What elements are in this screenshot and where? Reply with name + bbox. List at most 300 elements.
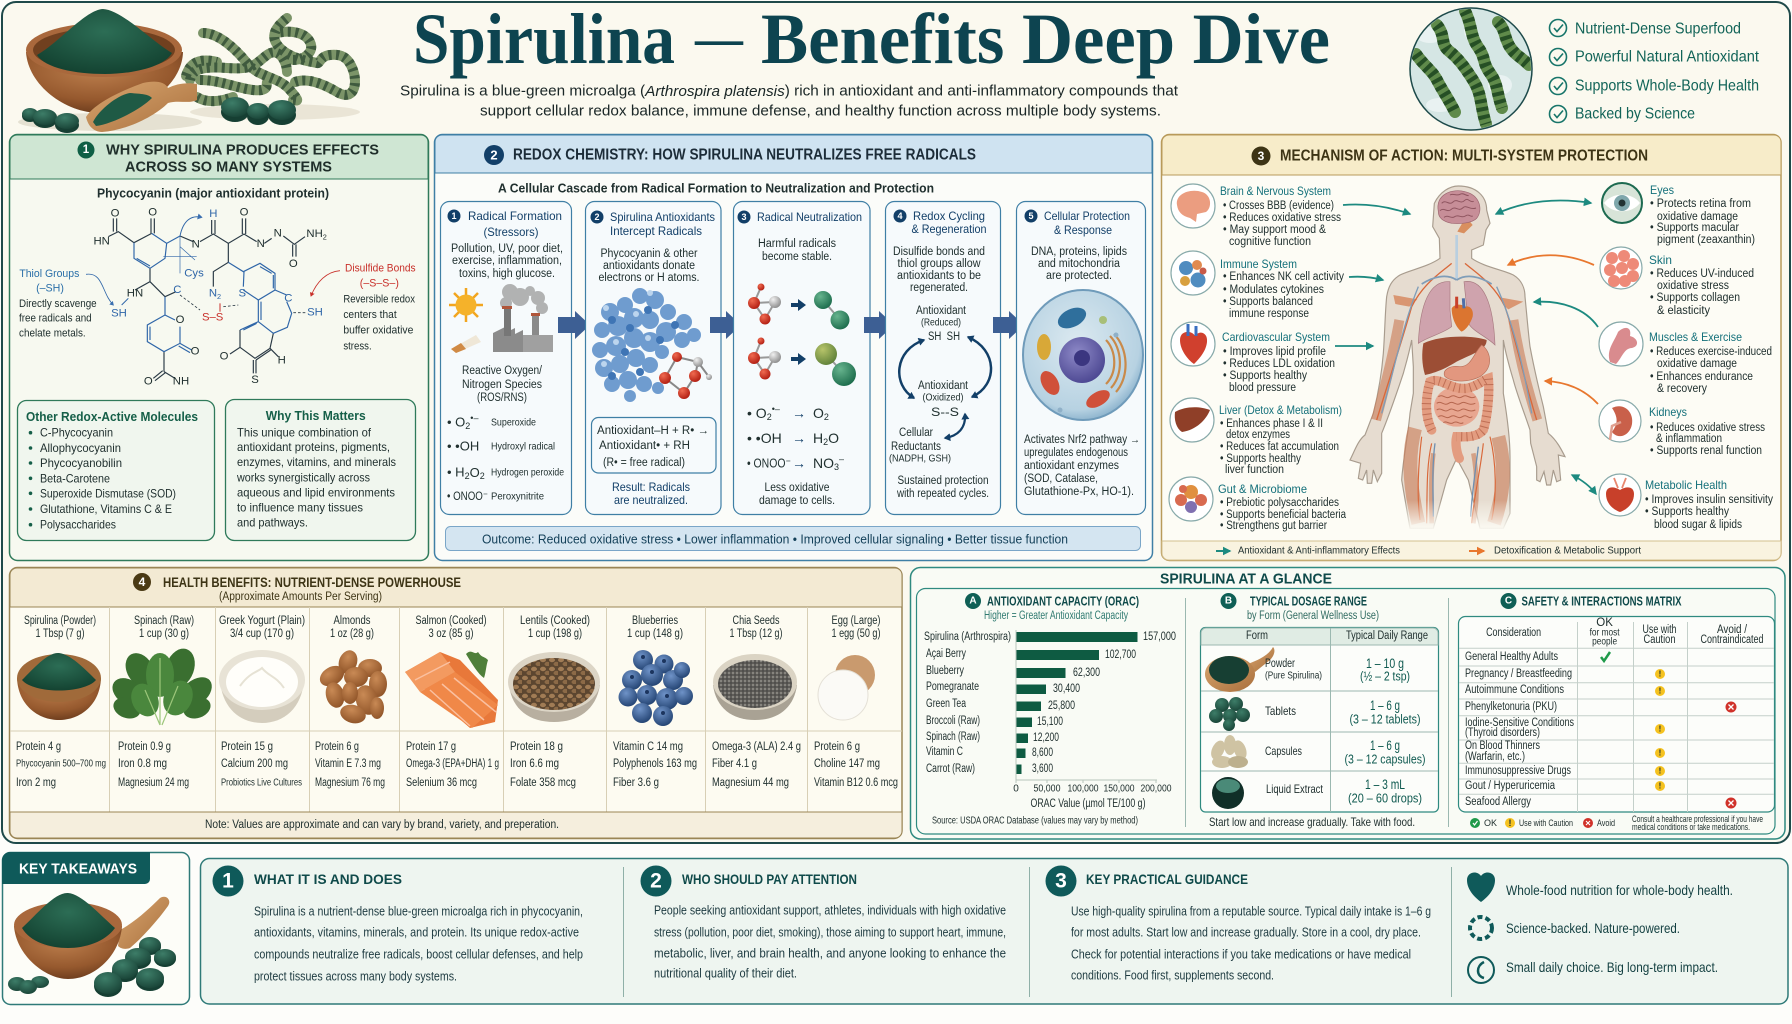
step 2: spirulina antioxidants bbox=[586, 202, 721, 514]
table C: safety and interactions matrix: (Thyroid disorders) bbox=[1465, 727, 1540, 739]
safety legend bbox=[1470, 814, 1763, 832]
slogans with icons: Whole-food nutrition for whole-body health. bbox=[1506, 882, 1733, 898]
heart bbox=[1452, 305, 1473, 332]
food: spirulina powder bbox=[16, 615, 106, 789]
formula box: Antioxidant• + RH bbox=[599, 440, 690, 452]
step 5: cellular protection: Activates Nrf2 pathway → bbox=[1024, 434, 1140, 446]
callout: disulfide bonds: stress. bbox=[343, 341, 372, 353]
chart: phycocyanin molecule diagram: O bbox=[176, 314, 185, 326]
step 1: radical formation bbox=[440, 202, 572, 514]
food: spirulina powder: Phycocyanin 500–700 mg bbox=[16, 758, 106, 770]
system: cardiovascular: • Improves lipid profile bbox=[1223, 346, 1326, 358]
chart A: ORAC bar chart: 0 bbox=[1013, 784, 1019, 794]
food: egg: Choline 147 mg bbox=[814, 758, 880, 770]
chart A: ORAC bar chart: 15,100 bbox=[1037, 716, 1063, 728]
step 4: redox cycling: regenerated. bbox=[910, 282, 968, 294]
chart: phycocyanin molecule diagram: O bbox=[144, 376, 153, 388]
food: spirulina powder: Spirulina (Powder) bbox=[24, 615, 96, 627]
step 1: radical formation: (ROS/RNS) bbox=[477, 392, 527, 404]
icon: powder scoop bbox=[1205, 647, 1274, 692]
table C: safety and interactions matrix: Seafood Allergy bbox=[1465, 796, 1531, 808]
step 3: radical neutralization: → bbox=[792, 430, 806, 446]
takeaway 2: 2 bbox=[650, 870, 662, 892]
stomach bbox=[1444, 345, 1490, 381]
system: immune: immune response bbox=[1229, 308, 1309, 320]
panel 2 header bbox=[435, 135, 1152, 173]
system: liver: • Enhances phase I & II bbox=[1220, 418, 1323, 430]
step 3: radical neutralization: • ONOO⁻ bbox=[747, 456, 791, 470]
step 3: radical neutralization: 2 bbox=[767, 412, 772, 422]
takeaway 2: WHO SHOULD PAY ATTENTION bbox=[682, 871, 857, 887]
chart A: ORAC bar chart: 100,000 bbox=[1068, 784, 1099, 794]
panel 1 header: 1 bbox=[83, 144, 90, 156]
food: lentils: Iron 6.6 mg bbox=[510, 758, 559, 770]
takeaway 3: KEY PRACTICAL GUIDANCE bbox=[1086, 871, 1248, 887]
table B: typical dosage range bbox=[1200, 593, 1438, 829]
title: Spirulina bbox=[413, 0, 675, 79]
table B: typical dosage range: (3 – 12 tablets) bbox=[1350, 712, 1420, 726]
box: other redox-active molecules: Phycocyanobilin bbox=[40, 456, 122, 470]
step 2: spirulina antioxidants: Intercept Radicals bbox=[610, 224, 702, 238]
panel 1 header bbox=[10, 135, 428, 179]
panel 2 header: REDOX CHEMISTRY: HOW SPIRULINA NEUTRALIZES FREE RADICALS bbox=[513, 146, 976, 164]
takeaway 1: antioxidants, vitamins, minerals, and protein. Its unique redox-active bbox=[254, 924, 579, 940]
chart A: ORAC bar chart: ORAC Value (µmol TE/100 g) bbox=[1030, 798, 1146, 810]
step 1: radical formation: Peroxynitrite bbox=[491, 492, 544, 502]
food: blueberries: Vitamin C 14 mg bbox=[613, 741, 683, 753]
system: kidneys: • Supports renal function bbox=[1650, 445, 1762, 457]
step 2: spirulina antioxidants: Spirulina Antioxidants bbox=[610, 210, 715, 224]
diagram: redox cycle: Cellular bbox=[899, 427, 933, 439]
step 1: radical formation: 2 bbox=[465, 471, 470, 481]
table B: typical dosage range: Form bbox=[1246, 630, 1268, 642]
table C: safety and interactions matrix: OK bbox=[1596, 617, 1613, 629]
box: why this matters: to influence many tissues bbox=[237, 500, 363, 514]
system: skin: & elasticity bbox=[1657, 305, 1710, 317]
food: spinach: Iron 0.8 mg bbox=[118, 758, 167, 770]
box: other redox-active molecules: Other Redox-Active Molecules bbox=[26, 409, 198, 424]
system: eyes: • Supports macular bbox=[1650, 222, 1739, 234]
system: brain and nervous: Brain & Nervous System bbox=[1220, 184, 1331, 198]
step 2: spirulina antioxidants: 2 bbox=[594, 212, 600, 222]
step 3: radical neutralization: Radical Neutralization bbox=[757, 210, 862, 224]
box: why this matters bbox=[226, 400, 416, 540]
food: spinach: 1 cup (30 g) bbox=[139, 628, 189, 640]
arrow: step 2 to 3 bbox=[710, 311, 741, 339]
takeaway 3: Check for potential interactions if you take medications or have medical bbox=[1071, 946, 1411, 962]
food: salmon: Protein 17 g bbox=[406, 741, 456, 753]
table C: safety and interactions matrix: SAFETY & INTERACTIONS MATRIX bbox=[1522, 594, 1682, 608]
food: spinach bbox=[107, 615, 218, 789]
panel 4 header: HEALTH BENEFITS: NUTRIENT-DENSE POWERHOUSE bbox=[163, 574, 461, 590]
table C: safety and interactions matrix: Avoid / bbox=[1717, 624, 1748, 636]
box: why this matters: aqueous and lipid environments bbox=[237, 485, 395, 499]
step 4: redox cycling: with repeated cycles. bbox=[896, 488, 989, 500]
table B: typical dosage range: (½ – 2 tsp) bbox=[1360, 668, 1410, 684]
food: chia seeds: Magnesium 44 mg bbox=[712, 777, 789, 789]
chart A: ORAC bar chart: Carrot (Raw) bbox=[926, 763, 975, 775]
box: other redox-active molecules: Glutathione, Vitamins C & E bbox=[40, 502, 172, 516]
chart A: ORAC bar chart: Spinach (Raw) bbox=[926, 731, 980, 743]
icon: radicals becoming stable molecules bbox=[748, 284, 856, 386]
food: lentils: Protein 18 g bbox=[510, 741, 563, 753]
status marks: ! bbox=[1659, 670, 1661, 678]
icon: cell bbox=[1023, 290, 1143, 420]
step 4: redox cycling: Redox Cycling bbox=[913, 209, 985, 223]
safety legend: Use with Caution bbox=[1519, 818, 1573, 828]
food: spirulina powder: Protein 4 g bbox=[16, 741, 61, 753]
step 1: radical formation: Hydrogen peroxide bbox=[491, 468, 564, 478]
step 1: radical formation: • ONOO⁻ bbox=[447, 489, 488, 503]
safety legend: OK bbox=[1484, 818, 1497, 828]
step 1: radical formation: 1 bbox=[451, 211, 457, 221]
system: gut bbox=[1169, 477, 1347, 532]
box: why this matters: This unique combination of bbox=[237, 426, 372, 440]
chart A: ORAC bar chart: 102,700 bbox=[1105, 649, 1136, 661]
table B: typical dosage range: TYPICAL DOSAGE RANGE bbox=[1250, 594, 1367, 608]
table B: typical dosage range: (3 – 12 capsules) bbox=[1344, 752, 1426, 766]
table C: safety and interactions matrix: people bbox=[1592, 636, 1617, 648]
system: metabolic: blood sugar & lipids bbox=[1654, 519, 1742, 531]
system: muscles: oxidative damage bbox=[1657, 358, 1737, 370]
chart A: ORAC bar chart: ANTIOXIDANT CAPACITY (ORAC) bbox=[987, 594, 1139, 608]
step 1: radical formation: Superoxide bbox=[491, 418, 536, 428]
chart: phycocyanin molecule diagram: O bbox=[220, 351, 229, 363]
callout: thiol groups: Directly scavenge bbox=[19, 298, 97, 310]
step 2: spirulina antioxidants: antioxidants donate bbox=[603, 260, 695, 272]
chart: phycocyanin molecule diagram: O bbox=[111, 207, 120, 219]
chart A: ORAC bar chart: 150,000 bbox=[1104, 784, 1135, 794]
step 3: radical neutralization: •– bbox=[772, 404, 780, 414]
chart: phycocyanin molecule diagram: NH bbox=[173, 376, 189, 388]
system: metabolic: Metabolic Health bbox=[1645, 478, 1727, 492]
food: egg: Vitamin B12 0.6 mcg bbox=[814, 777, 898, 789]
system: brain and nervous: • Reduces oxidative stress bbox=[1223, 212, 1341, 224]
chart: phycocyanin molecule diagram: H bbox=[278, 355, 286, 367]
step 4: redox cycling: Sustained protection bbox=[898, 475, 988, 487]
step 5: cellular protection: & Response bbox=[1054, 223, 1112, 237]
food: spinach: Protein 0.9 g bbox=[118, 741, 171, 753]
takeaway 1: compounds neutralize free radicals, boost cellular defenses, and help bbox=[254, 946, 583, 962]
chart A: ORAC bar chart: Broccoli (Raw) bbox=[926, 715, 980, 727]
food: salmon: Salmon (Cooked) bbox=[416, 615, 487, 627]
diagram: redox cycle bbox=[889, 305, 991, 464]
arrow: step 3 to 4 bbox=[864, 311, 894, 339]
step 3: radical neutralization: 2 bbox=[823, 437, 828, 447]
box: why this matters: and pathways. bbox=[237, 515, 308, 529]
diagram: redox cycle: S--S bbox=[931, 407, 959, 419]
food: chia seeds: 1 Tbsp (12 g) bbox=[730, 628, 783, 640]
food: lentils: 1 cup (198 g) bbox=[528, 628, 582, 640]
system: immune: • Modulates cytokines bbox=[1223, 284, 1324, 296]
large intestine bbox=[1426, 378, 1489, 458]
system: eyes: pigment (zeaxanthin) bbox=[1657, 234, 1755, 246]
callout: thiol groups: (–SH) bbox=[36, 282, 64, 294]
panel 4 header bbox=[10, 568, 902, 607]
icon: protein molecule bbox=[592, 288, 712, 402]
table C: safety and interactions matrix: (Warfarin, etc.) bbox=[1465, 751, 1525, 763]
system: immune: • Supports balanced bbox=[1223, 296, 1313, 308]
step 3: radical neutralization: 3 bbox=[741, 212, 747, 222]
food: spinach: Magnesium 24 mg bbox=[118, 777, 189, 789]
food: chia seeds: Fiber 4.1 g bbox=[712, 758, 757, 770]
system: eyes bbox=[1602, 183, 1755, 246]
food: lentils: Lentils (Cooked) bbox=[520, 615, 590, 627]
step 4: redox cycling bbox=[886, 202, 1000, 514]
diagram: redox cycle: SH SH bbox=[928, 331, 960, 343]
table B: typical dosage range: Capsules bbox=[1265, 744, 1302, 758]
system: liver: Liver (Detox & Metabolism) bbox=[1219, 403, 1342, 417]
food: blueberries: Fiber 3.6 g bbox=[613, 777, 659, 789]
system: skin: • Supports collagen bbox=[1650, 292, 1740, 304]
chart A: ORAC bar chart: Green Tea bbox=[926, 698, 966, 710]
diagram: redox cycle: Antioxidant bbox=[916, 305, 967, 317]
chart: phycocyanin molecule diagram: O bbox=[289, 258, 298, 270]
chart: phycocyanin molecule diagram: Cys bbox=[184, 267, 204, 279]
panel 4 header: 4 bbox=[139, 575, 146, 589]
system: liver: liver function bbox=[1225, 464, 1284, 476]
step 5: cellular protection: DNA, proteins, lipids bbox=[1031, 246, 1127, 258]
system: muscles: Muscles & Exercise bbox=[1649, 330, 1742, 344]
box: other redox-active molecules: Polysaccharides bbox=[40, 518, 116, 532]
system: gut: • Supports beneficial bacteria bbox=[1220, 509, 1347, 521]
table C: safety and interactions matrix: Phenylketonuria (PKU) bbox=[1465, 701, 1557, 713]
chart A: ORAC bar chart: 157,000 bbox=[1143, 631, 1176, 643]
panel 4 header: (Approximate Amounts Per Serving) bbox=[219, 591, 382, 603]
step 3: radical neutralization: 3 bbox=[834, 462, 839, 472]
callout: disulfide bonds bbox=[343, 262, 416, 353]
icon: capsules bbox=[1208, 735, 1249, 768]
step 3: radical neutralization: H bbox=[813, 430, 823, 446]
step 5: cellular protection bbox=[1016, 202, 1146, 514]
slogans with icons: Science-backed. Nature-powered. bbox=[1506, 920, 1680, 936]
step 3: radical neutralization: • •OH bbox=[747, 430, 782, 446]
status marks: ! bbox=[1659, 724, 1661, 734]
key takeaways flag: KEY TAKEAWAYS bbox=[19, 860, 137, 878]
callout: disulfide bonds: (–S–S–) bbox=[360, 277, 399, 289]
food: blueberries: 1 cup (148 g) bbox=[627, 628, 683, 640]
system: eyes: oxidative damage bbox=[1657, 211, 1738, 223]
food: chia seeds: Chia Seeds bbox=[732, 615, 780, 627]
checklist: Backed by Science bbox=[1575, 106, 1695, 122]
chart A: ORAC bar chart: 50,000 bbox=[1034, 784, 1061, 794]
table C: safety and interactions matrix: Consideration bbox=[1486, 627, 1541, 639]
table C: safety and interactions matrix: Immunosuppressive Drugs bbox=[1465, 765, 1571, 777]
title bbox=[413, 0, 1330, 79]
system: gut: Gut & Microbiome bbox=[1218, 482, 1307, 496]
chart A: ORAC bar chart: Higher = Greater Antioxidant Capacity bbox=[984, 610, 1128, 622]
formula box: (R• = free radical) bbox=[603, 457, 685, 469]
system: skin: • Reduces UV-induced bbox=[1650, 268, 1754, 280]
table B: typical dosage range: (Pure Spirulina) bbox=[1265, 670, 1322, 682]
chart: phycocyanin molecule diagram: HN bbox=[127, 287, 143, 299]
subtitle bbox=[400, 82, 1179, 120]
table C: safety and interactions matrix: for most bbox=[1590, 628, 1620, 638]
box: other redox-active molecules: Beta-Carotene bbox=[40, 471, 110, 485]
arrow: step 4 to 5 bbox=[993, 311, 1024, 339]
chart: phycocyanin molecule diagram bbox=[19, 207, 416, 388]
system: cardiovascular: Cardiovascular System bbox=[1222, 330, 1330, 344]
food: egg: 1 egg (50 g) bbox=[832, 628, 881, 640]
takeaway 3: Use high-quality spirulina from a reputable source. Typical daily intake is 1–6 g bbox=[1071, 904, 1431, 918]
step 5: cellular protection: 5 bbox=[1028, 211, 1034, 221]
note: Note: Values are approximate and can vary by brand, variety, and preperation. bbox=[205, 819, 559, 831]
callout: thiol groups: free radicals and bbox=[19, 313, 92, 325]
chart: phycocyanin molecule diagram: N bbox=[209, 287, 217, 299]
icon: sun, factory and cigarette bbox=[449, 284, 553, 353]
table B: typical dosage range: 1 – 10 g bbox=[1366, 655, 1404, 671]
glance title: SPIRULINA AT A GLANCE bbox=[1160, 570, 1332, 588]
panel 2 header: 2 bbox=[490, 148, 498, 162]
step 3: radical neutralization: damage to cells. bbox=[759, 493, 835, 507]
status marks: ! bbox=[1659, 686, 1661, 696]
chart: phycocyanin molecule diagram: S bbox=[239, 287, 247, 299]
step 3: radical neutralization: O bbox=[828, 430, 839, 446]
icon: tablets bbox=[1209, 697, 1250, 731]
food: greek yogurt bbox=[219, 615, 305, 788]
status marks: ! bbox=[1659, 766, 1661, 776]
formula box bbox=[592, 418, 716, 473]
step 1: radical formation: •– bbox=[470, 413, 478, 423]
table B: typical dosage range: by Form (General Wellness Use) bbox=[1247, 610, 1379, 622]
takeaway 1 bbox=[212, 866, 583, 984]
takeaway 1: protect tissues across many body systems. bbox=[254, 968, 457, 984]
table C: safety and interactions matrix: Gout / Hyperuricemia bbox=[1465, 780, 1555, 792]
takeaway 1: Spirulina is a nutrient-dense blue-green microalga rich in phycocyanin, bbox=[254, 904, 583, 918]
chart A: ORAC bar chart: 62,300 bbox=[1073, 667, 1100, 679]
box: why this matters: enzymes, vitamins, and minerals bbox=[237, 455, 396, 469]
chart A: ORAC bar chart: 12,200 bbox=[1033, 732, 1059, 744]
food: salmon: Selenium 36 mcg bbox=[406, 777, 477, 789]
table C: safety and interactions matrix: Autoimmune Conditions bbox=[1465, 684, 1564, 696]
food: blueberries: Blueberries bbox=[632, 615, 678, 627]
checklist: Powerful Natural Antioxidant bbox=[1575, 48, 1760, 66]
table B: typical dosage range: Start low and increase gradually. Take with food. bbox=[1209, 815, 1415, 829]
chart: phycocyanin molecule diagram: 2 bbox=[323, 232, 327, 241]
chart: phycocyanin molecule diagram: O bbox=[191, 346, 200, 358]
callout: thiol groups: Thiol Groups bbox=[19, 268, 79, 280]
callout: disulfide bonds: Disulfide Bonds bbox=[345, 262, 416, 274]
chart A: ORAC bar chart: Vitamin C bbox=[926, 746, 963, 758]
step 5: cellular protection: and mitochondria bbox=[1038, 258, 1121, 270]
safety legend: medical conditions or take medications. bbox=[1632, 822, 1750, 832]
arrow: step 1 to 2 bbox=[558, 311, 590, 339]
step 1: radical formation: exercise, inflammation, bbox=[452, 255, 562, 267]
food: egg: Egg (Large) bbox=[832, 615, 881, 627]
food: spirulina powder: 1 Tbsp (7 g) bbox=[36, 628, 85, 640]
chart A: ORAC bar chart: Pomegranate bbox=[926, 681, 979, 693]
chart A: ORAC bar chart: 25,800 bbox=[1048, 700, 1075, 712]
chart: phycocyanin molecule diagram: SH bbox=[307, 307, 323, 319]
step 5: cellular protection: (SOD, Catalase, bbox=[1024, 473, 1098, 485]
callout: disulfide bonds: Reversible redox bbox=[343, 293, 416, 305]
table C: safety and interactions matrix: Pregnancy / Breastfeeding bbox=[1465, 668, 1572, 680]
step 5: cellular protection: Glutathione-Px, HO-1). bbox=[1024, 486, 1134, 498]
step 3: radical neutralization bbox=[734, 202, 870, 514]
status marks: ! bbox=[1659, 748, 1661, 758]
food: salmon bbox=[405, 615, 499, 789]
system: brain and nervous: • May support mood & bbox=[1223, 224, 1326, 236]
panel 1 header: ACROSS SO MANY SYSTEMS bbox=[125, 158, 332, 176]
system: immune: Immune System bbox=[1220, 257, 1297, 271]
food: spinach: Spinach (Raw) bbox=[134, 615, 194, 627]
brain bbox=[1457, 217, 1473, 233]
chart: phycocyanin molecule diagram: C bbox=[284, 292, 292, 304]
food: almonds: 1 oz (28 g) bbox=[330, 628, 374, 640]
box: other redox-active molecules: C-Phycocyanin bbox=[40, 426, 113, 440]
takeaway 1: WHAT IT IS AND DOES bbox=[254, 871, 402, 887]
step 2: spirulina antioxidants: Result: Radicals bbox=[612, 480, 690, 494]
panel: key takeaways content bbox=[200, 858, 1788, 1004]
food: egg bbox=[814, 615, 898, 789]
safety legend: ! bbox=[1508, 818, 1512, 828]
step 4: redox cycling: & Regeneration bbox=[912, 222, 986, 236]
takeaway 3: 3 bbox=[1055, 870, 1067, 892]
system: skin bbox=[1600, 247, 1754, 317]
chart A: ORAC bar chart: 8,600 bbox=[1032, 747, 1053, 759]
food: blueberries bbox=[613, 615, 697, 789]
legend bbox=[1162, 541, 1781, 560]
table B: typical dosage range: B bbox=[1225, 596, 1232, 606]
outcome bar: Outcome: Reduced oxidative stress • Lower inflammation • Improved cellular signaling • Better tissue function bbox=[482, 532, 1068, 546]
system: brain and nervous bbox=[1171, 184, 1341, 248]
molecule heading: Phycocyanin (major antioxidant protein) bbox=[97, 186, 329, 200]
step 3: radical neutralization: 2 bbox=[824, 412, 829, 422]
panel 1 header: WHY SPIRULINA PRODUCES EFFECTS bbox=[106, 142, 379, 158]
status marks bbox=[1601, 652, 1736, 808]
system: liver: • Supports healthy bbox=[1220, 453, 1301, 465]
step 3: radical neutralization: → bbox=[792, 455, 806, 471]
cascade subheading: A Cellular Cascade from Radical Formation to Neutralization and Protection bbox=[498, 180, 934, 196]
step 2: spirulina antioxidants: are neutralized. bbox=[614, 493, 688, 507]
checklist: Supports Whole-Body Health bbox=[1575, 78, 1759, 94]
takeaway 2: People seeking antioxidant support, athletes, individuals with high oxidative bbox=[654, 902, 1006, 918]
system: brain and nervous: cognitive function bbox=[1229, 236, 1311, 248]
table B: typical dosage range: 1 – 3 mL bbox=[1365, 776, 1405, 792]
table B: typical dosage range: (20 – 60 drops) bbox=[1348, 790, 1422, 806]
slogans with icons bbox=[1467, 873, 1733, 983]
chart: phycocyanin molecule diagram: NH bbox=[306, 228, 323, 240]
step 4: redox cycling: 4 bbox=[897, 211, 903, 221]
table B: typical dosage range: Liquid Extract bbox=[1266, 782, 1324, 796]
title: Benefits Deep Dive bbox=[761, 0, 1330, 79]
food: salmon: 3 oz (85 g) bbox=[428, 628, 474, 640]
system: muscles bbox=[1599, 322, 1772, 395]
outcome bar bbox=[446, 526, 1140, 550]
diagram: redox cycle: Antioxidant bbox=[918, 380, 969, 392]
table C: safety and interactions matrix bbox=[1458, 593, 1774, 832]
panel: health benefits bbox=[10, 568, 902, 838]
table C: safety and interactions matrix: General Healthy Adults bbox=[1465, 651, 1558, 663]
takeaway 3 bbox=[1046, 866, 1431, 982]
system: muscles: • Enhances endurance bbox=[1650, 371, 1753, 383]
title: — bbox=[694, 10, 744, 68]
system: kidneys: & inflammation bbox=[1656, 433, 1722, 445]
chart A: ORAC bar chart: A bbox=[969, 596, 977, 606]
chart A: ORAC bar chart: Blueberry bbox=[926, 665, 964, 677]
chart: phycocyanin molecule diagram: C bbox=[173, 284, 181, 296]
panel 3 header: MECHANISM OF ACTION: MULTI-SYSTEM PROTECTION bbox=[1280, 148, 1648, 164]
food: almonds: Vitamin E 7.3 mg bbox=[315, 758, 381, 770]
system: metabolic bbox=[1599, 474, 1773, 531]
diagram: redox cycle: Reductants bbox=[891, 441, 941, 453]
panel: key takeaways card bbox=[2, 852, 190, 1004]
step 2: spirulina antioxidants: Phycocyanin & other bbox=[600, 248, 698, 260]
chart A: ORAC bar chart: 30,400 bbox=[1053, 683, 1080, 695]
box: other redox-active molecules: Superoxide Dismutase (SOD) bbox=[40, 486, 176, 500]
chart A: ORAC bar chart: 3,600 bbox=[1032, 763, 1053, 775]
lungs bbox=[1418, 282, 1452, 343]
